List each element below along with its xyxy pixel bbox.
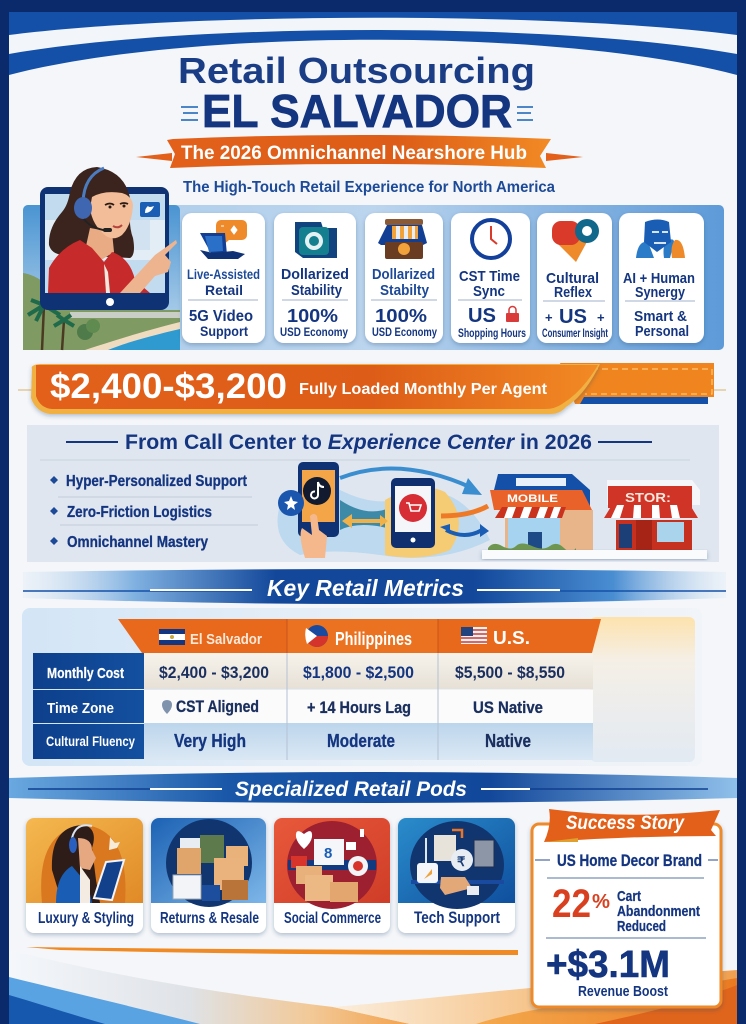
pod: luxury and styling [26, 818, 143, 933]
feature card 5: Reflex [554, 284, 593, 301]
pod: tech support [398, 818, 515, 933]
feature card 2 [274, 213, 356, 343]
illustration: mobile store [490, 474, 593, 552]
hair [49, 167, 134, 258]
orange divider bar [26, 947, 518, 955]
price banner [18, 363, 726, 414]
feature card 4: US [468, 305, 496, 327]
table header: U.S. [493, 628, 530, 648]
stat: cart abandonment [552, 882, 700, 935]
illustration: phones to stores [278, 462, 490, 558]
title [178, 50, 535, 137]
table header [118, 619, 601, 653]
table body [144, 653, 593, 760]
stat: revenue boost: +$3.1M [546, 944, 670, 986]
section header: specialized retail pods [9, 772, 737, 803]
stat: cart abandonment: Cart [617, 888, 641, 905]
feature card 5: + [597, 310, 605, 325]
panel: feature cards [23, 205, 724, 350]
feature card 6: AI + Human [623, 270, 695, 287]
pod label: Luxury & Styling [38, 910, 134, 927]
illustration: mobile store: MOBILE [507, 493, 558, 505]
table body: Moderate [327, 731, 395, 751]
table body: CST Aligned [176, 697, 259, 716]
feature card 1 [182, 213, 265, 343]
list of capabilities: Omnichannel Mastery [67, 534, 208, 551]
illustration: store [604, 480, 700, 552]
panel: call center to experience center [27, 425, 719, 562]
table row headers [33, 653, 144, 759]
feature card 2: USD Economy [280, 325, 348, 339]
table row headers: Time Zone [47, 700, 114, 717]
pod: social commerce: 8 [324, 845, 332, 862]
headset [83, 168, 104, 202]
illustration: store: STOR: [625, 490, 671, 505]
red shirt [48, 240, 150, 293]
section header: specialized retail pods: Specialized Retail Pods [235, 778, 467, 801]
brand name: US Home Decor Brand [557, 851, 702, 870]
pod label: Tech Support [414, 908, 500, 927]
table body: US Native [473, 698, 543, 717]
feature card 3: 100% [375, 306, 427, 326]
feature card 6 [619, 213, 704, 343]
illustration: shop base [482, 544, 707, 559]
pod: tech support: ₹ [457, 854, 466, 869]
feature card 6: Personal [635, 323, 689, 340]
list of capabilities: Zero-Friction Logistics [67, 504, 212, 521]
panel: success story [532, 809, 721, 1007]
pod: social commerce [274, 818, 390, 933]
section header: key retail metrics [23, 569, 726, 604]
feature card 4: Shopping Hours [458, 326, 526, 340]
heading: From Call Center to Experience Center in 2026 [125, 431, 592, 454]
table header: El Salvador [190, 631, 262, 648]
table body: $1,800 - $2,500 [303, 663, 414, 682]
subtitle ribbon [136, 135, 583, 168]
table body: $2,400 - $3,200 [159, 663, 269, 682]
feature card 1: Live-Assisted [187, 266, 260, 282]
coastal scene [23, 205, 180, 350]
bottom decorative waves [9, 950, 737, 1024]
pod label: Returns & Resale [160, 910, 259, 927]
stat: cart abandonment: Abandonment [617, 903, 700, 920]
subtitle ribbon: The 2026 Omnichannel Nearshore Hub [181, 143, 527, 164]
feature card 4 [451, 213, 530, 343]
header curved bands [9, 12, 737, 75]
feature card 4: CST Time [459, 268, 520, 285]
pod label: Social Commerce [284, 910, 381, 927]
feature card 3: Stabilty [380, 282, 430, 299]
pointing arm [120, 240, 177, 293]
table body: Native [485, 731, 531, 751]
pod: returns and resale [151, 818, 266, 933]
table header: Philippines [335, 629, 412, 649]
table row headers: Cultural Fluency [46, 733, 135, 749]
feature card 4: Sync [473, 283, 505, 300]
feature card 1: Retail [205, 282, 243, 298]
feature card 5: + [545, 310, 553, 325]
price banner: Fully Loaded Monthly Per Agent [299, 381, 548, 398]
feature card 5 [537, 213, 612, 343]
panel: metrics table [22, 608, 702, 766]
feature card 3: Dollarized [372, 266, 435, 283]
title: Retail Outsourcing [178, 50, 535, 91]
table backdrop [22, 608, 702, 766]
stat: cart abandonment: 22 [552, 882, 591, 926]
section header: key retail metrics: Key Retail Metrics [267, 575, 464, 601]
stat: cart abandonment: Reduced [617, 918, 666, 935]
tagline: The High-Touch Retail Experience for North America [183, 179, 555, 196]
feature card 5: Consumer Insight [542, 326, 608, 340]
price banner: $2,400-$3,200 [50, 367, 287, 406]
neck and face [86, 228, 114, 262]
feature card 1: 5G Video [189, 308, 253, 325]
table body: $5,500 - $8,550 [455, 663, 565, 682]
feature card 6: Synergy [635, 284, 686, 301]
feature card 1: Support [200, 323, 248, 339]
feature card 2: 100% [287, 306, 338, 326]
stat: revenue boost: Revenue Boost [578, 983, 668, 1000]
feature card 5: US [559, 306, 587, 328]
feature card 3: USD Economy [372, 325, 437, 339]
success story ribbon: Success Story [566, 813, 685, 834]
success story ribbon [544, 809, 720, 842]
feature card 2: Stability [291, 282, 343, 299]
list of capabilities: Hyper-Personalized Support [66, 473, 248, 490]
feature card 6: Smart & [634, 308, 687, 325]
list of capabilities [50, 473, 258, 551]
stat: cart abandonment: % [592, 891, 610, 913]
table row headers: Monthly Cost [47, 665, 124, 682]
feature card 3 [365, 213, 443, 343]
feature card 5: Cultural [546, 270, 599, 287]
feature card 2: Dollarized [281, 266, 349, 283]
title: EL SALVADOR [202, 85, 512, 137]
table body: Very High [174, 731, 246, 751]
table body: + 14 Hours Lag [307, 698, 411, 717]
icon: agent on tablet [40, 167, 177, 310]
